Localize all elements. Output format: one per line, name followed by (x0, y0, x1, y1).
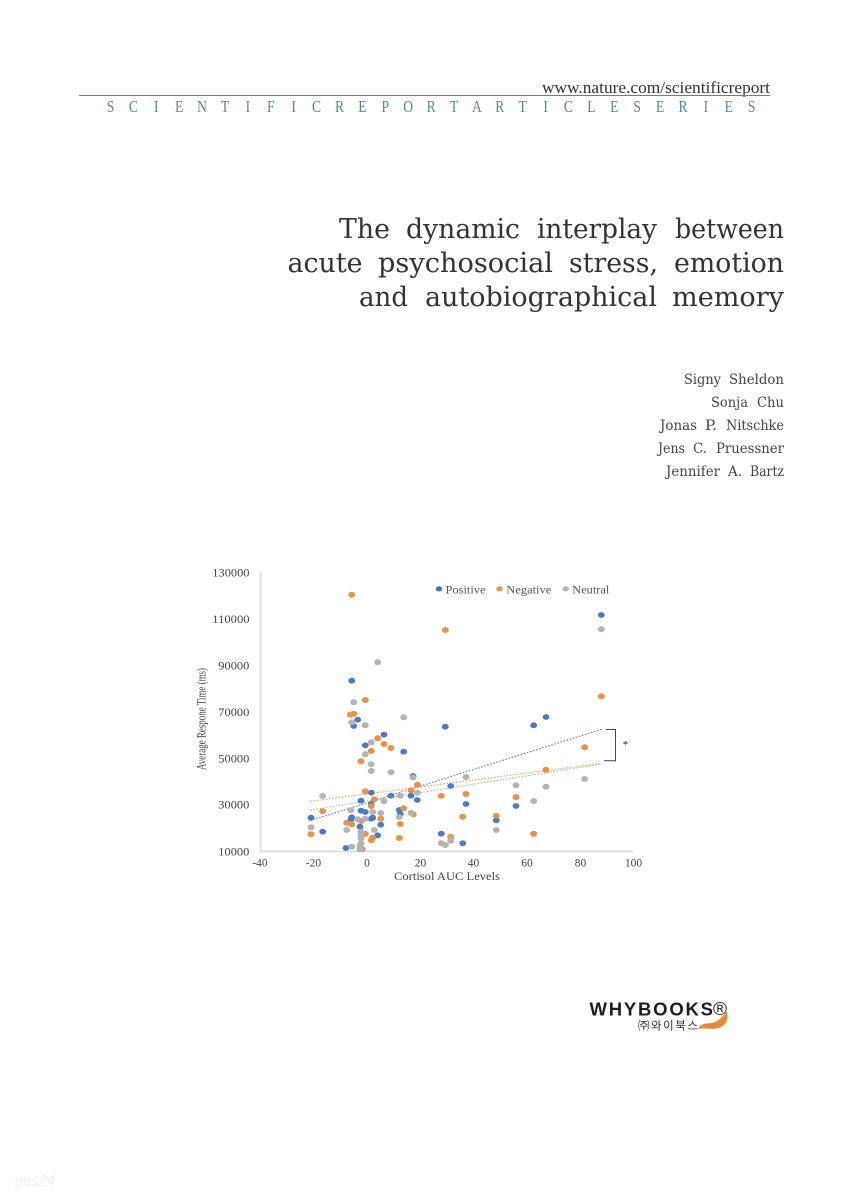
header url: www.nature.com/scientificreport (542, 78, 770, 97)
authors: Signy (684, 372, 721, 388)
authors: Pruessner (716, 441, 785, 457)
authors: Chu (757, 395, 784, 411)
y axis tick labels: 90000 (218, 661, 250, 673)
trend lines (310, 729, 602, 821)
authors: Nitschke (726, 418, 784, 434)
title: between (675, 213, 784, 245)
x axis tick labels: 80 (575, 858, 586, 870)
chart axes (260, 572, 633, 852)
logo registered mark: ® (713, 999, 727, 1019)
authors: C. (693, 441, 707, 457)
neutral data points (308, 626, 605, 852)
authors: A. (727, 464, 742, 480)
y axis tick labels: 130000 (212, 568, 250, 580)
authors: Jonas (658, 418, 697, 434)
negative data points (308, 592, 605, 852)
title: acute (288, 247, 362, 279)
header (79, 78, 770, 116)
publisher logo (590, 998, 728, 1032)
x axis tick labels: 20 (415, 858, 426, 870)
watermark: ges24 (15, 1173, 55, 1190)
logo korean name: ㈜와이북스 (638, 1020, 698, 1032)
y axis tick labels: 110000 (212, 614, 250, 626)
legend: Positive (446, 584, 486, 596)
x axis tick labels: -40 (252, 858, 268, 870)
scatter chart (194, 568, 642, 883)
x axis tick labels (252, 858, 642, 870)
y axis tick labels: 70000 (218, 707, 250, 719)
authors: Jens (656, 441, 685, 457)
title: interplay (537, 213, 657, 245)
x axis tick labels: 60 (521, 858, 533, 870)
title: The (339, 213, 390, 245)
y axis tick labels: 10000 (218, 846, 250, 858)
title: emotion (674, 247, 784, 279)
logo wordmark: WHYBOOKS (590, 998, 713, 1020)
authors: Bartz (750, 464, 784, 480)
authors: Sheldon (729, 372, 784, 388)
y axis tick labels: 30000 (218, 800, 250, 812)
significance bracket: * (623, 739, 628, 751)
title: memory (672, 281, 784, 313)
title: psychosocial (378, 247, 553, 279)
series label: SCIENTIFICREPORTARTICLESERIES (107, 98, 755, 116)
legend: Neutral (572, 584, 609, 596)
logo swoosh (698, 1011, 728, 1029)
positive data points (308, 612, 605, 851)
significance bracket (604, 730, 628, 761)
x axis tick labels: 100 (625, 858, 642, 870)
title (288, 213, 784, 313)
x axis tick labels: -20 (306, 858, 321, 870)
y axis tick labels: 50000 (218, 753, 250, 765)
authors: P. (705, 418, 717, 434)
authors: Sonja (711, 395, 748, 411)
x axis tick labels: 40 (468, 858, 480, 870)
title: autobiographical (425, 281, 657, 313)
title: dynamic (406, 213, 520, 245)
legend (436, 584, 609, 596)
title: and (359, 281, 408, 313)
x axis tick labels: 0 (364, 858, 370, 870)
authors: Jennifer (664, 464, 721, 480)
legend: Negative (506, 584, 551, 596)
x axis title: Cortisol AUC Levels (394, 871, 501, 883)
y axis title: Average Respone Time (ms) (194, 668, 208, 770)
title: stress, (569, 247, 658, 279)
authors (656, 372, 785, 480)
y axis tick labels (212, 568, 250, 858)
